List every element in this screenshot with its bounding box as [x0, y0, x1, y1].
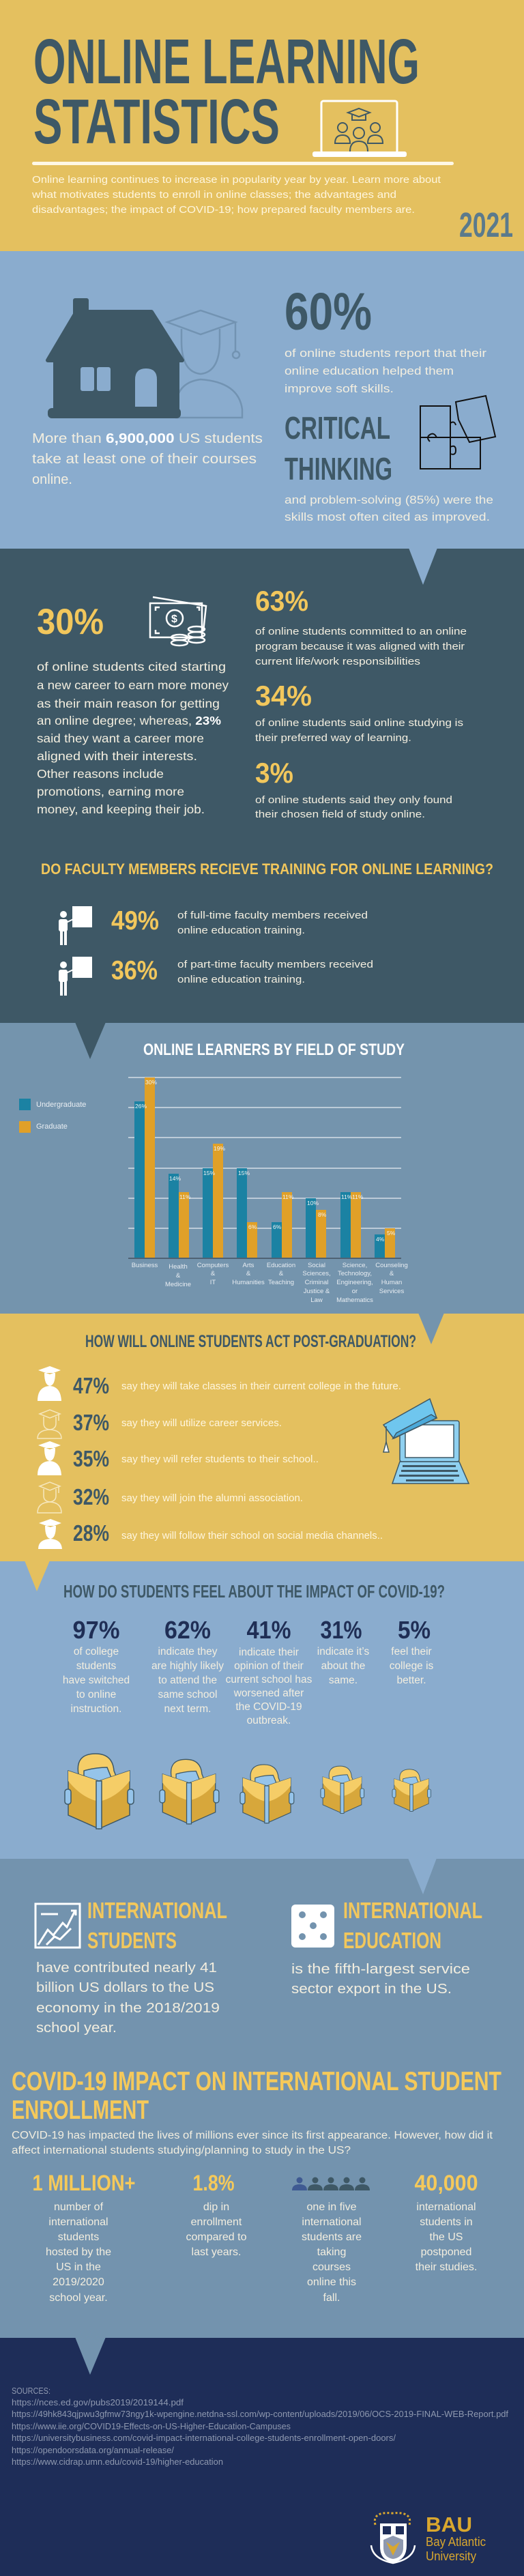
- text: one in five: international: [302, 2216, 362, 2228]
- arrow: pointer from blue: [408, 1858, 437, 1894]
- bar chart: 6%: [273, 1224, 282, 1230]
- text: fifth largest: is the fifth-largest service: [291, 1962, 470, 1977]
- stat: 30% new career: [37, 602, 229, 816]
- stat: 1 million+: hosted by the: [46, 2246, 111, 2258]
- stat: 3%: [255, 757, 452, 820]
- text: one in five: fall.: [323, 2292, 340, 2304]
- text: contribution: school year.: [36, 2021, 117, 2036]
- icon: teacher 1: [59, 906, 92, 945]
- icon: laptop with graduation cap: [383, 1399, 469, 1484]
- bar chart: &: [279, 1270, 284, 1277]
- row: 28%: say they will follow their school on social media channels..: [121, 1530, 383, 1542]
- intro paragraph: Online learning continues to increase in popularity year by year. Learn more about: [32, 174, 441, 186]
- stat: 1.8%: last years.: [192, 2246, 241, 2258]
- bar chart: Arts: [243, 1262, 254, 1269]
- panel: motivations (dark): $: [171, 613, 177, 625]
- stat: 34%: 34%: [255, 680, 312, 712]
- stat: 40,000: the US: [430, 2231, 463, 2243]
- bar chart: 19%: [214, 1145, 225, 1152]
- stat: 60% soft skills: 60%: [285, 283, 372, 341]
- stat: 49%: 49%: [111, 906, 159, 936]
- stat: 34%: their preferred way of learning.: [255, 732, 411, 744]
- stat: 60% soft skills: online education helped them: [285, 364, 454, 377]
- bar chart: Medicine: [165, 1281, 191, 1288]
- stat: critical thinking: and problem-solving (85%) were the: [285, 493, 493, 506]
- panel: footer: [0, 2337, 524, 2576]
- stat: 41%: worsened after: [233, 1688, 304, 1699]
- bar chart: or: [352, 1288, 358, 1295]
- stat: 60% soft skills: [285, 283, 486, 395]
- heading: chart title: ONLINE LEARNERS BY FIELD OF STUDY: [143, 1041, 405, 1059]
- stat: 5%: feel their: [391, 1646, 432, 1658]
- stat: 30% new career: as their main reason for getting: [37, 697, 220, 710]
- bar chart: &: [390, 1270, 394, 1277]
- stat: 31%: [317, 1616, 369, 1686]
- stat: 41%: indicate their: [239, 1647, 299, 1658]
- row: 35%: [38, 1441, 319, 1475]
- bar chart: 10%: [307, 1200, 319, 1206]
- bar chart: IT: [210, 1279, 216, 1286]
- heading: international education: [343, 1898, 482, 1953]
- title: [33, 26, 420, 157]
- bar chart: Education: [267, 1262, 295, 1269]
- text: one in five: courses: [312, 2261, 351, 2273]
- bar chart: 11%: [341, 1193, 353, 1200]
- stat: 36%: [111, 956, 373, 985]
- text: contribution: economy in the 2018/2019: [36, 2001, 220, 2016]
- stat: 1 million+: 2019/2020: [53, 2276, 104, 2288]
- stat: 97%: of college: [74, 1646, 119, 1658]
- stat: 6,900,000 students: online.: [32, 472, 72, 487]
- stat: 1.8%: 1.8%: [192, 2171, 235, 2195]
- bar chart: Engineering,: [336, 1279, 373, 1286]
- stat: 30% new career: of online students cited starting: [37, 660, 226, 674]
- stat: critical thinking: THINKING: [285, 451, 392, 487]
- stat: 97%: have switched: [63, 1675, 130, 1686]
- text: fifth largest: [291, 1962, 470, 1997]
- bar chart: &: [211, 1270, 216, 1277]
- bar chart: 8%: [318, 1211, 327, 1218]
- row: 32%: 32%: [73, 1484, 109, 1509]
- bar chart: 4%: [376, 1236, 385, 1243]
- stat: 63%: program because it was aligned with their: [255, 641, 465, 652]
- stat: 3%: of online students said they only found: [255, 794, 452, 806]
- stat: 1.8%: [186, 2171, 247, 2258]
- logo: BAU wordmark: Bay Atlantic: [426, 2535, 486, 2549]
- stat: 36%: of part-time faculty members received: [177, 959, 373, 970]
- text: contribution: billion US dollars to the US: [36, 1980, 214, 1995]
- sources: https://opendoorsdata.org/annual-release/: [12, 2445, 174, 2455]
- title: STATISTICS: [33, 86, 280, 157]
- stat: 60% soft skills: of online students report that their: [285, 347, 486, 360]
- icon: puzzle: [420, 396, 495, 469]
- stat: 40,000: 40,000: [415, 2171, 478, 2195]
- bar chart: 11%: [352, 1193, 364, 1200]
- stat: 41%: current school has: [226, 1674, 312, 1685]
- bar chart: Justice &: [304, 1288, 330, 1295]
- stat: 30% new career: Other reasons include: [37, 767, 164, 781]
- logo: BAU wordmark: BAU: [426, 2513, 472, 2536]
- bar chart: 11%: [282, 1193, 294, 1200]
- stat: 1 million+: international: [48, 2216, 108, 2228]
- row: 37%: 37%: [73, 1410, 109, 1435]
- stat: 63%: current life/work responsibilities: [255, 656, 420, 667]
- arrow: pointer from chart: [418, 1313, 444, 1344]
- stat: 62%: are highly likely: [151, 1660, 224, 1672]
- stat: 40,000: postponed: [421, 2246, 471, 2258]
- row: 32%: [38, 1482, 303, 1513]
- stat: 5%: college is: [390, 1660, 434, 1672]
- bar chart: 5%: [387, 1230, 396, 1236]
- stat: 62%: to attend the: [158, 1675, 217, 1686]
- stat: 5%: better.: [396, 1675, 426, 1686]
- stat: 30% new career: said they want a career more: [37, 732, 204, 745]
- icon: growth chart: [35, 1904, 80, 1948]
- heading: international education: INTERNATIONAL: [343, 1898, 482, 1923]
- stat: 30% new career: a new career to earn more money: [37, 678, 229, 692]
- stat: 1 million+: 1 MILLION+: [33, 2171, 135, 2195]
- text: contribution: have contributed nearly 41: [36, 1960, 217, 1976]
- stat: 41%: [226, 1616, 312, 1726]
- bar chart: 30%: [145, 1079, 157, 1086]
- stat: critical thinking: [285, 410, 493, 523]
- stat: 5%: [390, 1616, 434, 1686]
- stat: 62%: 62%: [164, 1616, 211, 1644]
- stat: 31%: about the: [321, 1660, 365, 1672]
- arrow: pointer from mid: [75, 2337, 106, 2375]
- text: one in five: one in five: [307, 2201, 357, 2213]
- sources: https://www.iie.org/COVID19-Effects-on-US-Higher-Education-Campuses: [12, 2421, 291, 2431]
- stat: 30% new career: money, and keeping their job.: [37, 802, 205, 816]
- icon: money: [150, 597, 206, 646]
- stat: 1.8%: dip in: [203, 2201, 229, 2213]
- bar chart: Human: [381, 1279, 402, 1286]
- stat: 41%: 41%: [247, 1616, 291, 1644]
- bar chart: 15%: [203, 1170, 215, 1176]
- icon: house: [48, 298, 182, 418]
- stat: 1 million+: school year.: [49, 2292, 108, 2304]
- bar chart: Counseling: [375, 1262, 408, 1269]
- heading: international students: INTERNATIONAL: [87, 1898, 227, 1923]
- icon: five people: [292, 2177, 370, 2190]
- row: 37%: [38, 1410, 282, 1438]
- stat: 1 million+: US in the: [56, 2261, 101, 2273]
- stat: 31%: 31%: [321, 1616, 362, 1644]
- bar chart: [128, 1077, 408, 1304]
- icon: readers row: [65, 1754, 431, 1829]
- bar chart: Social: [308, 1262, 325, 1269]
- stat: 97%: [63, 1616, 130, 1715]
- bar chart: Health: [169, 1263, 188, 1271]
- stat: 30% new career: an online degree; whereas, 23%: [37, 714, 221, 727]
- legend: Undergraduate: [36, 1101, 86, 1109]
- sources: SOURCES:: [12, 2386, 50, 2396]
- text: enrollment intro: COVID-19 has impacted the lives of millions ever since its first appearance. However, how did it: [12, 2130, 493, 2141]
- logo: BAU crest: [371, 2513, 415, 2563]
- text: enrollment intro: [12, 2130, 493, 2156]
- intro paragraph: disadvantages; the impact of COVID-19; how prepared faculty members are.: [32, 204, 415, 216]
- heading: covid impact on enrollment: ENROLLMENT: [12, 2096, 149, 2125]
- bar chart: 6%: [248, 1224, 257, 1230]
- stat: 62%: next term.: [164, 1703, 211, 1715]
- icon: graduate outline: [167, 310, 242, 418]
- icon: dice: [291, 1905, 334, 1948]
- stat: 40,000: students in: [420, 2216, 473, 2228]
- stat: 97%: 97%: [72, 1616, 120, 1644]
- stat: 36%: online education training.: [177, 974, 305, 985]
- sources: https://nces.ed.gov/pubs2019/2019144.pdf: [12, 2397, 184, 2407]
- bar chart: Humanities: [232, 1279, 265, 1286]
- stat: 62%: indicate they: [158, 1646, 218, 1658]
- bar chart: 11%: [179, 1193, 191, 1200]
- row: 32%: say they will join the alumni association.: [121, 1492, 303, 1504]
- sources: https://49hk843qjpwu3gfmw73ngy1k-wpengine.netdna-ssl.com/wp-content/uploads/2019/06/OCS-2019-FINAL-WEB-Report.pdf: [12, 2409, 508, 2419]
- panel: post-graduation: [0, 1313, 524, 1561]
- stat: 1 million+: [33, 2171, 135, 2304]
- intro paragraph: [31, 174, 441, 216]
- stat: 62%: [151, 1616, 224, 1715]
- text: contribution: [36, 1960, 220, 2036]
- text: one in five: [302, 2201, 362, 2304]
- row: 37%: say they will utilize career services.: [121, 1417, 282, 1429]
- stat: 49%: [111, 906, 368, 936]
- bar chart: Sciences,: [302, 1270, 331, 1277]
- stat: 31%: indicate it’s: [317, 1646, 369, 1658]
- bar chart: Business: [132, 1262, 158, 1269]
- stat: 63%: of online students committed to an online: [255, 626, 467, 637]
- row: 35%: 35%: [73, 1446, 109, 1471]
- sources: https://www.cidrap.umn.edu/covid-19/higher-education: [12, 2457, 223, 2467]
- bar chart: 15%: [238, 1170, 250, 1176]
- stat: critical thinking: CRITICAL: [285, 410, 390, 446]
- stat: 49%: of full-time faculty members received: [177, 910, 368, 921]
- stat: 60% soft skills: improve soft skills.: [285, 382, 394, 395]
- sources: [12, 2386, 508, 2467]
- stat: 1 million+: students: [58, 2231, 99, 2243]
- bar chart: &: [176, 1272, 181, 1279]
- stat: 30% new career: promotions, earning more: [37, 785, 184, 798]
- stat: 40,000: their studies.: [416, 2261, 477, 2273]
- stat: 3%: their chosen field of study online.: [255, 809, 425, 820]
- stat: 40,000: [415, 2171, 478, 2273]
- stat: 1 million+: number of: [54, 2201, 104, 2213]
- stat: 34%: of online students said online studying is: [255, 717, 463, 729]
- row: 28%: [38, 1519, 383, 1549]
- text: fifth largest: sector export in the US.: [291, 1982, 452, 1997]
- legend: Graduate: [36, 1123, 68, 1131]
- bar chart: Teaching: [268, 1279, 294, 1286]
- row: 35%: say they will refer students to their school..: [121, 1453, 319, 1465]
- stat: 41%: opinion of their: [234, 1660, 304, 1672]
- panel: motivations (dark): [0, 548, 524, 1023]
- row: 47%: 47%: [73, 1373, 109, 1398]
- stat: 62%: same school: [158, 1689, 218, 1701]
- stat: 6,900,000 students: take at least one of their courses: [32, 452, 257, 467]
- row: 28%: 28%: [73, 1520, 109, 1546]
- logo: BAU wordmark: [426, 2513, 486, 2563]
- intro paragraph: what motivates students to enroll in online classes; the advantages and: [31, 189, 396, 201]
- stat: 34%: [255, 680, 463, 744]
- bar chart: Mathematics: [336, 1297, 373, 1304]
- stat: 40,000: international: [416, 2201, 476, 2213]
- stat: critical thinking: skills most often cited as improved.: [285, 510, 490, 523]
- arrow: pointer from dark: [75, 1022, 106, 1059]
- bar chart: Technology,: [338, 1270, 372, 1277]
- panel: header: [0, 0, 524, 251]
- text: one in five: taking: [317, 2246, 346, 2258]
- stat: 5%: 5%: [398, 1616, 431, 1644]
- panel: online students overview: [0, 251, 524, 549]
- row: 47%: say they will take classes in their current college in the future.: [121, 1380, 401, 1392]
- stat: 30% new career: 30%: [37, 602, 104, 642]
- bar chart: Services: [379, 1288, 404, 1295]
- bar chart: 26%: [135, 1103, 147, 1110]
- stat: 97%: instruction.: [71, 1703, 121, 1715]
- stat: 36%: 36%: [111, 956, 158, 985]
- stat: 41%: outbreak.: [247, 1715, 291, 1726]
- stat: 31%: same.: [329, 1675, 358, 1686]
- stat: 97%: students: [76, 1660, 117, 1672]
- legend: [19, 1099, 86, 1133]
- bar chart: Criminal: [305, 1279, 328, 1286]
- icon: teacher 2: [59, 957, 92, 996]
- bar chart: 14%: [169, 1175, 181, 1182]
- text: enrollment intro: affect international students studying/planning to study in the US?: [12, 2145, 351, 2156]
- stat: 49%: online education training.: [177, 925, 305, 936]
- stat: 3%: 3%: [255, 757, 293, 789]
- stat: 6,900,000 students: [32, 431, 263, 487]
- panel: field of study chart: [0, 1022, 524, 1314]
- stat: 41%: the COVID-19: [235, 1701, 302, 1713]
- stat: 30% new career: aligned with their interests.: [37, 749, 197, 763]
- bar chart: Science,: [343, 1262, 367, 1269]
- bar chart: &: [246, 1270, 251, 1277]
- bar chart: Computers: [197, 1262, 229, 1269]
- stat: 97%: to online: [76, 1689, 116, 1701]
- text: one in five: students are: [302, 2231, 362, 2243]
- sources: https://universitybusiness.com/covid-impact-international-college-students-enrollment-open-doors/: [12, 2433, 396, 2443]
- panel: covid impact feelings: [0, 1561, 524, 1859]
- row: 47%: [38, 1366, 401, 1401]
- logo: BAU wordmark: University: [426, 2549, 476, 2563]
- stat: 63%: 63%: [255, 585, 308, 617]
- panel: international students: [0, 1858, 524, 2338]
- heading: international students: [87, 1898, 227, 1953]
- heading: international education: EDUCATION: [343, 1928, 441, 1953]
- heading: covid impact on enrollment: [12, 2067, 501, 2125]
- text: one in five: online this: [307, 2276, 356, 2288]
- stat: 1.8%: enrollment: [191, 2216, 242, 2228]
- bar chart: Law: [310, 1297, 323, 1304]
- arrow: pointer from yellow: [25, 1561, 50, 1591]
- stat: 1.8%: compared to: [186, 2231, 247, 2243]
- arrow: pointer from blue: [409, 548, 437, 585]
- stat: 63%: [255, 585, 467, 667]
- heading: international students: STUDENTS: [87, 1928, 177, 1953]
- icon: laptop with students: [312, 101, 407, 157]
- stat: 6,900,000 students: More than 6,900,000 US students: [32, 431, 263, 446]
